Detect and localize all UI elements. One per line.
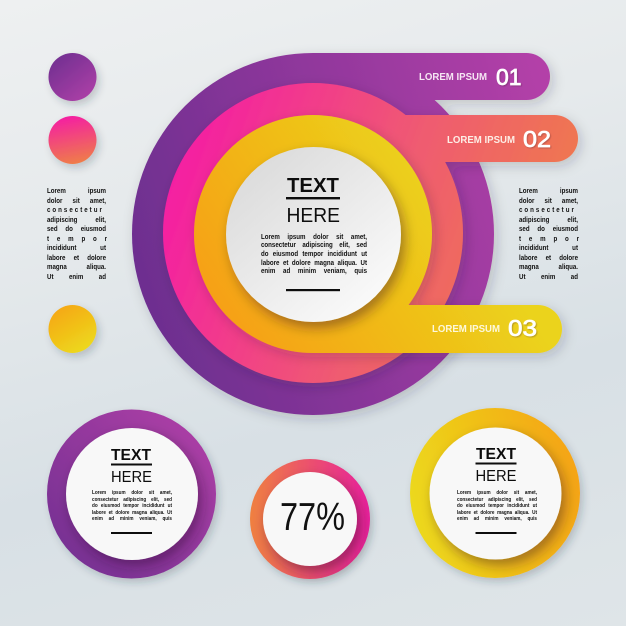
right side text bbox=[519, 186, 587, 281]
left side text: magna aliqua. bbox=[47, 262, 106, 271]
bottom right body text: do eiusmod tempor incididunt ut bbox=[457, 503, 537, 509]
bottom right body text bbox=[457, 490, 537, 522]
central body text: Lorem ipsum dolor sit amet, bbox=[261, 232, 367, 240]
tab 02 label: 02 bbox=[523, 126, 551, 152]
tab 01 label: 01 bbox=[496, 64, 522, 90]
left side text: Lorem ipsum bbox=[47, 186, 106, 195]
central body text: labore et dolore magna aliqua. Ut bbox=[261, 258, 367, 267]
purple ring with tab 01 bbox=[132, 53, 550, 415]
left side text: consectetur bbox=[47, 205, 104, 214]
percentage value: 77% bbox=[280, 496, 345, 539]
central heading bbox=[286, 174, 340, 291]
left side text: labore et dolore bbox=[47, 253, 106, 262]
right side text: incididunt ut bbox=[519, 243, 578, 252]
central body text: consectetur adipiscing elit, sed bbox=[261, 240, 367, 249]
bottom left heading: HERE bbox=[111, 469, 152, 486]
tab 01 label: LOREM IPSUM bbox=[419, 72, 487, 83]
left side text: dolor sit amet, bbox=[47, 196, 106, 205]
central heading: TEXT bbox=[287, 174, 339, 197]
central heading: HERE bbox=[286, 204, 340, 227]
bottom right circle bbox=[410, 408, 580, 578]
tab 03 label: LOREM IPSUM bbox=[432, 324, 500, 335]
central body text: do eiusmod tempor incididunt ut bbox=[261, 249, 367, 258]
right side text: dolor sit amet, bbox=[519, 196, 578, 205]
bottom left body text: Lorem ipsum dolor sit amet, bbox=[92, 490, 172, 496]
central body text: enim ad minim veniam, quis bbox=[261, 266, 367, 275]
bottom left body text: enim ad minim veniam, quis bbox=[92, 516, 172, 522]
right side text: Ut enim ad bbox=[519, 272, 578, 281]
left side text: Ut enim ad bbox=[47, 272, 106, 281]
left side text: tempor bbox=[47, 234, 115, 243]
bottom right body text: labore et dolore magna aliqua. Ut bbox=[457, 510, 537, 516]
bottom left circle bbox=[47, 410, 216, 578]
left side text bbox=[47, 186, 115, 281]
tab 03 label: 03 bbox=[508, 315, 537, 341]
left side text: adipiscing elit, bbox=[47, 215, 106, 224]
bottom left body text bbox=[92, 490, 172, 522]
bottom right heading: HERE bbox=[476, 468, 516, 485]
bottom right heading: TEXT bbox=[476, 446, 516, 463]
right side text: tempor bbox=[519, 234, 587, 243]
right side text: Lorem ipsum bbox=[519, 186, 578, 195]
pink ring with tab 02 bbox=[163, 83, 578, 383]
left side text: sed do eiusmod bbox=[47, 224, 106, 233]
tab 02 label bbox=[447, 126, 551, 152]
tab 02 label: LOREM IPSUM bbox=[447, 135, 515, 146]
tab 03 label bbox=[432, 315, 537, 341]
bottom middle circle bbox=[250, 459, 370, 579]
right side text: sed do eiusmod bbox=[519, 224, 578, 233]
bottom left heading bbox=[111, 447, 152, 534]
small pink dot bbox=[48, 116, 96, 164]
bottom right heading bbox=[476, 446, 516, 534]
right side text: labore et dolore bbox=[519, 253, 578, 262]
right side text: adipiscing elit, bbox=[519, 215, 578, 224]
right side text: magna aliqua. bbox=[519, 262, 578, 271]
bottom right body text: Lorem ipsum dolor sit amet, bbox=[457, 490, 537, 496]
bottom right body text: consectetur adipiscing elit, sed bbox=[457, 497, 537, 503]
small purple dot bbox=[48, 53, 96, 101]
bottom left body text: do eiusmod tempor incididunt ut bbox=[92, 503, 172, 509]
central white circle bbox=[226, 147, 401, 322]
small yellow dot bbox=[48, 305, 96, 353]
yellow ring with tab 03 bbox=[194, 115, 562, 353]
bottom left body text: consectetur adipiscing elit, sed bbox=[92, 497, 172, 503]
left side text: incididunt ut bbox=[47, 243, 106, 252]
tab 01 label bbox=[419, 64, 522, 90]
bottom left heading: TEXT bbox=[111, 447, 151, 464]
bottom right body text: enim ad minim veniam, quis bbox=[457, 516, 537, 522]
bottom left body text: labore et dolore magna aliqua. Ut bbox=[92, 510, 172, 516]
right side text: consectetur bbox=[519, 205, 576, 214]
central body text bbox=[261, 232, 367, 275]
